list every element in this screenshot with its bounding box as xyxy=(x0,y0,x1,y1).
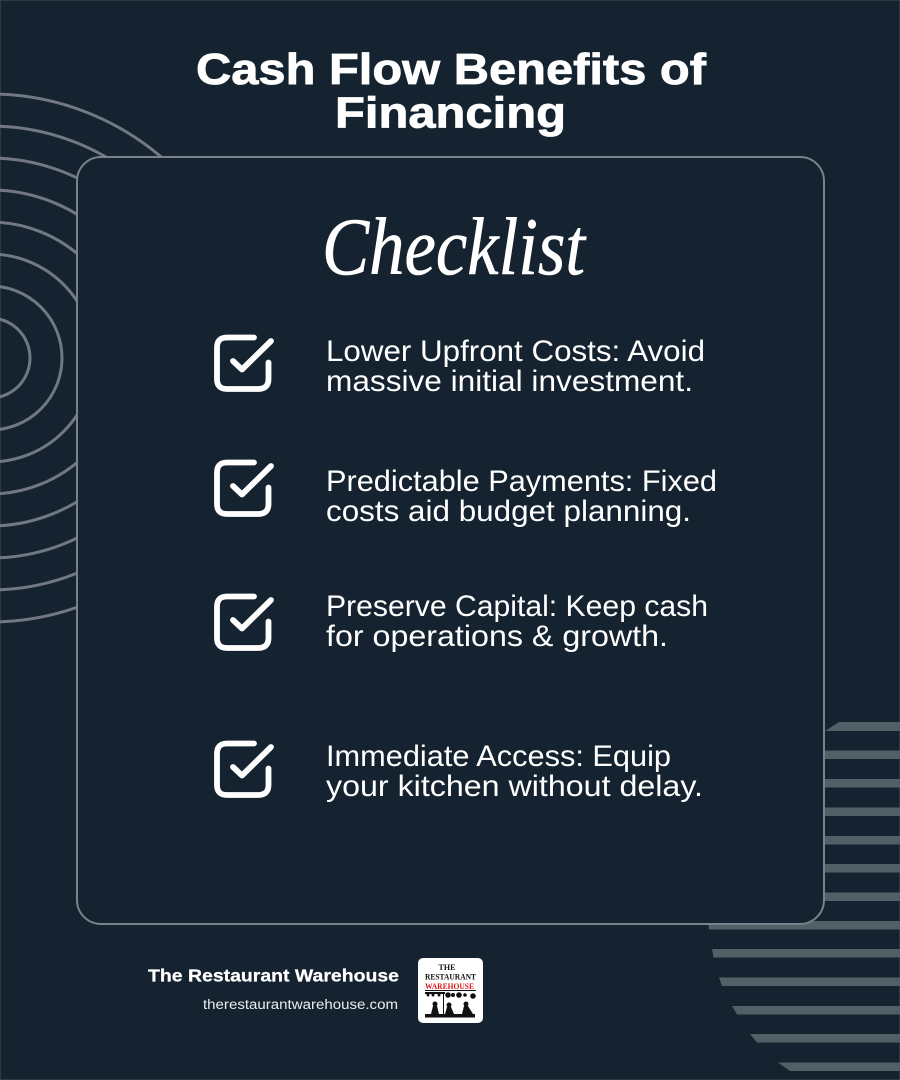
item text 3: for operations & growth. xyxy=(326,620,668,653)
logo: RESTAURANT xyxy=(425,972,477,982)
item text 2: costs aid budget planning. xyxy=(326,495,691,528)
icon: checkbox 3 xyxy=(217,596,271,648)
checklist item: lower upfront costs xyxy=(217,335,705,398)
checklist heading: Checklist xyxy=(322,201,587,292)
checklist item: immediate access xyxy=(217,740,703,803)
icon: checkbox 4 xyxy=(217,744,271,795)
footer brand name: The Restaurant Warehouse xyxy=(148,966,399,986)
item text 1: massive initial investment. xyxy=(326,365,693,398)
icon: checkbox 1 xyxy=(217,338,271,389)
checklist item: preserve capital xyxy=(217,590,708,653)
decorative concentric rings xyxy=(0,94,254,622)
logo: THE xyxy=(439,963,455,972)
title xyxy=(196,45,706,138)
title: Cash Flow Benefits of xyxy=(196,45,706,94)
item text 3: Preserve Capital: Keep cash xyxy=(326,590,708,623)
footer website: therestaurantwarehouse.com xyxy=(203,997,398,1012)
item text 1 xyxy=(326,335,705,398)
item text 3 xyxy=(326,590,708,653)
item text 2 xyxy=(326,465,717,528)
checklist item: predictable payments xyxy=(217,462,717,528)
item text 1: Lower Upfront Costs: Avoid xyxy=(326,335,705,368)
logo: WAREHOUSE xyxy=(425,982,474,991)
title: Financing xyxy=(335,88,566,138)
item text 4 xyxy=(326,740,703,803)
item text 4: Immediate Access: Equip xyxy=(326,740,671,773)
logo xyxy=(418,958,483,1023)
panel: checklist xyxy=(77,157,824,924)
item text 2: Predictable Payments: Fixed xyxy=(326,465,717,498)
item text 4: your kitchen without delay. xyxy=(326,770,703,803)
decorative horizontal stripes xyxy=(708,722,900,1071)
icon: checkbox 2 xyxy=(217,462,271,514)
